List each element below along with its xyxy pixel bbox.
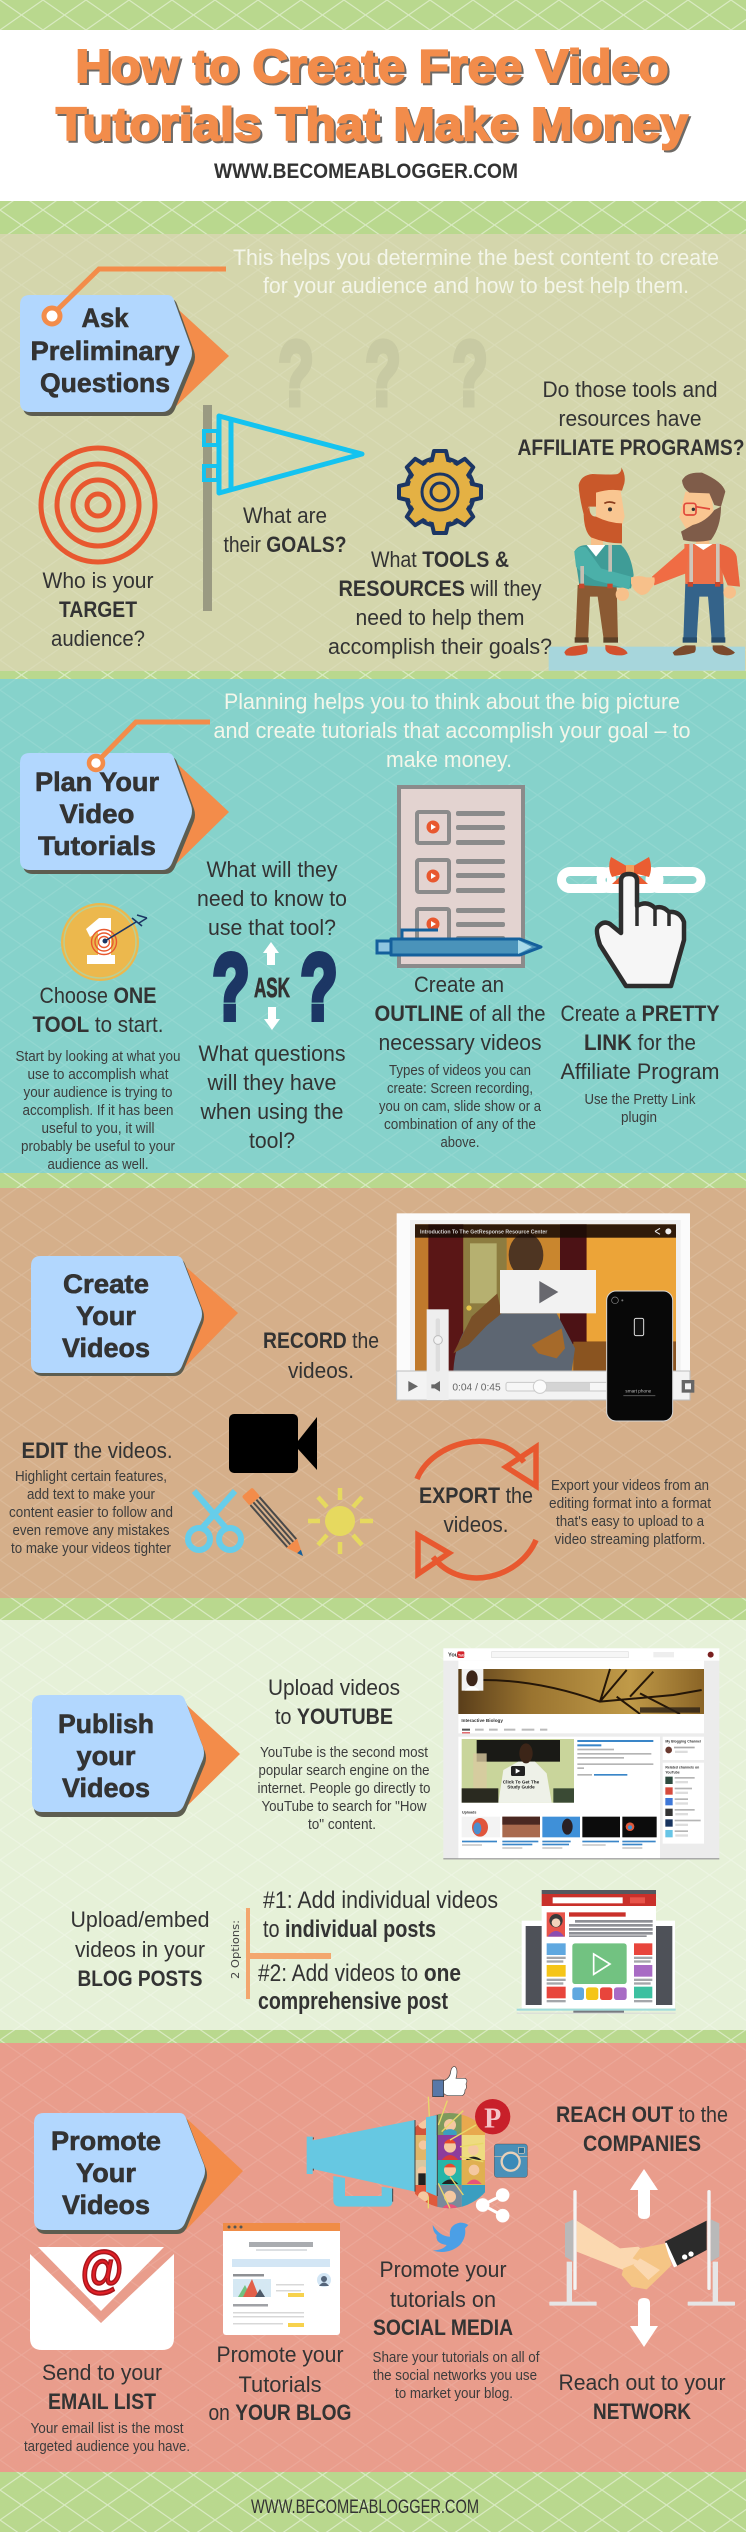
heading label: publish your videos: your (76, 1741, 136, 1771)
record text (263, 1328, 379, 1383)
pretty link text: Affiliate Program (560, 1059, 720, 1084)
youtube channel screenshot: Click To Get The (503, 1779, 540, 1784)
need to know text: need to know to (197, 886, 347, 911)
your blog text: Tutorials (238, 2372, 322, 2397)
youtube description: to" content. (308, 1816, 376, 1833)
companies text: REACH OUT to the (556, 2102, 728, 2127)
record text: RECORD the (263, 1328, 379, 1353)
social media text: SOCIAL MEDIA (373, 2315, 513, 2340)
icon: blog page (223, 2223, 340, 2335)
your blog text: on YOUR BLOG (208, 2400, 352, 2425)
choose one tool description: accomplish. If it has been (22, 1102, 174, 1119)
target audience text (42, 568, 154, 651)
icon: email envelope (30, 2241, 174, 2350)
smartphone: smart phone (625, 1388, 652, 1393)
youtube channel screenshot: You (448, 1653, 459, 1659)
arrow: down (630, 2298, 658, 2347)
pen (377, 930, 541, 955)
social media text (373, 2257, 513, 2340)
icon: video outline document with pen (377, 787, 541, 966)
outline text: necessary videos (378, 1030, 542, 1055)
outline text (374, 972, 546, 1055)
pretty link text: LINK for the (584, 1030, 696, 1055)
youtube description: YouTube to search for "How (262, 1798, 427, 1815)
panel: create your videos (9, 1213, 712, 1578)
questions text: when using the (200, 1099, 344, 1124)
your blog text (208, 2342, 352, 2425)
heading label: ask preliminary questions: Questions (40, 368, 170, 398)
youtube description: popular search engine on the (258, 1762, 430, 1779)
heading label: publish your videos: Publish (58, 1709, 154, 1739)
blog posts text: videos in your (75, 1937, 205, 1962)
choose one tool description: useful to you, it will (42, 1120, 154, 1137)
choose one tool description: audience as well. (48, 1156, 148, 1173)
choose one tool text: Choose ONE (40, 983, 156, 1008)
icon: gear (399, 451, 481, 533)
icon: scissors (188, 1491, 241, 1550)
choose one tool description: Start by looking at what you (16, 1048, 180, 1065)
panel: plan your video tutorials (16, 689, 720, 1173)
choose one tool description: probably be useful to your (21, 1138, 175, 1155)
email list description: targeted audience you have. (24, 2438, 190, 2455)
affiliate programs text (518, 377, 744, 460)
footer url: WWW.BECOMEABLOGGER.COM (251, 2497, 479, 2518)
youtube description: internet. People go directly to (258, 1780, 430, 1797)
export text: videos. (444, 1512, 508, 1537)
panel: promote your videos (24, 2067, 735, 2455)
title: Tutorials That Make Money (56, 98, 688, 150)
youtube channel screenshot: Related channels on (665, 1766, 699, 1770)
export description: Export your videos from an (551, 1477, 709, 1494)
export description: editing format into a format (549, 1495, 712, 1512)
heading label: promote your videos: Promote (51, 2126, 161, 2156)
youtube channel screenshot: Study Guide (507, 1785, 535, 1790)
icon: video camera (229, 1414, 317, 1473)
edit description: even remove any mistakes (12, 1522, 170, 1539)
intro text (214, 689, 690, 772)
pinterest: P (484, 2104, 501, 2135)
question marks (278, 323, 488, 425)
blog posts text (70, 1907, 210, 1991)
outline text: Create an (414, 972, 504, 997)
icon: export cycle arrows (417, 1441, 536, 1578)
outline description: create: Screen recording, (387, 1080, 533, 1097)
target audience text: audience? (51, 626, 145, 651)
option one text: #1: Add individual videos (263, 1887, 498, 1914)
heading label: plan your video tutorials: Video (60, 799, 134, 829)
heading label: plan your video tutorials (20, 722, 229, 874)
icon: sun (308, 1488, 373, 1554)
pretty link description (584, 1091, 696, 1126)
network text (558, 2370, 726, 2424)
choose one tool description: use to accomplish what (28, 1066, 169, 1083)
intro text: and create tutorials that accomplish your goal – to (214, 718, 690, 743)
youtube text (268, 1675, 400, 1729)
title (56, 40, 688, 150)
pretty link text (560, 1001, 720, 1084)
questions text (198, 1041, 346, 1153)
edit description (9, 1468, 173, 1557)
export text (419, 1483, 533, 1537)
options bracket (229, 1908, 331, 1999)
email list text: EMAIL LIST (48, 2389, 156, 2414)
heading label: promote your videos: Your (76, 2158, 136, 2188)
outline description: combination of any of the (384, 1116, 536, 1133)
youtube channel screenshot: Interactive Biology (461, 1718, 503, 1723)
affiliate programs text: resources have (558, 406, 702, 431)
affiliate programs text: Do those tools and (542, 377, 718, 402)
social media text: Promote your (380, 2257, 506, 2282)
facebook thumb (433, 2067, 467, 2097)
youtube channel screenshot: My Blogging Channel (665, 1740, 701, 1744)
icon: ask with question marks and arrows: ? (300, 935, 338, 1039)
outline text: OUTLINE of all the (374, 1001, 546, 1026)
youtube text: to YOUTUBE (275, 1704, 393, 1729)
heading label: ask preliminary questions (20, 269, 229, 416)
youtube channel screenshot: Uploads (462, 1810, 476, 1814)
illustration: handshake between monitors (549, 2190, 735, 2306)
pretty link description: Use the Pretty Link (584, 1091, 696, 1108)
video player screenshot with smartphone: Introduction To The GetResponse Resource Center (420, 1230, 548, 1236)
icon: target (41, 448, 155, 562)
icon: email envelope: @ (80, 2241, 124, 2299)
export description: that's easy to upload to a (556, 1513, 705, 1530)
illustration: two men shaking hands (549, 467, 745, 671)
right man (652, 473, 740, 655)
share icon (476, 2188, 509, 2222)
goals text: What are (243, 503, 327, 528)
edit description: Highlight certain features, (15, 1468, 167, 1485)
email list description (24, 2420, 190, 2455)
heading label: create your videos: Create (63, 1269, 149, 1299)
outline description: you on cam, slide show or a (379, 1098, 542, 1115)
edit description: content easier to follow and (9, 1504, 173, 1521)
heading label: create your videos: Your (76, 1301, 136, 1331)
heading label: ask preliminary questions: Ask (82, 303, 129, 333)
intro text (233, 245, 719, 298)
export description: video streaming platform. (554, 1531, 706, 1548)
icon: pennant flag (203, 405, 362, 611)
panel: publish your videos (32, 1648, 719, 2015)
icon: ask with question marks and arrows: ? (212, 935, 250, 1039)
icon: number one target badge (61, 903, 147, 981)
your blog text: Promote your (216, 2342, 344, 2367)
edit text: EDIT the videos. (22, 1438, 172, 1463)
heading label: create your videos (31, 1256, 238, 1376)
email list description: Your email list is the most (30, 2420, 184, 2437)
heading label: publish your videos: Videos (62, 1773, 150, 1803)
megaphone (307, 2115, 437, 2207)
tools text: accomplish their goals? (328, 634, 552, 659)
blog posts text: BLOG POSTS (78, 1966, 202, 1991)
youtube description: YouTube is the second most (260, 1744, 429, 1761)
pretty link text: Create a PRETTY (560, 1001, 720, 1026)
companies text (556, 2102, 728, 2156)
intro text: This helps you determine the best content to create (233, 245, 719, 270)
heading label: create your videos: Videos (62, 1333, 150, 1363)
social media description: Share your tutorials on all of (372, 2349, 540, 2366)
youtube channel screenshot: Tube (458, 1653, 466, 1657)
video player screenshot with smartphone: 0:04 / 0:45 (452, 1382, 501, 1393)
icon: ask with question marks and arrows (212, 935, 338, 1039)
light rays (428, 2097, 483, 2208)
website url: WWW.BECOMEABLOGGER.COM (214, 160, 518, 183)
option one text: to individual posts (263, 1916, 436, 1943)
video player screenshot with smartphone (397, 1213, 694, 1421)
heading label: plan your video tutorials: Plan Your (35, 767, 159, 797)
crowd of faces (415, 2110, 485, 2210)
edit description: to make your videos tighter (11, 1540, 171, 1557)
choose one tool text: TOOL to start. (32, 1012, 164, 1037)
intro text: Planning helps you to think about the big picture (224, 689, 680, 714)
network text: Reach out to your (558, 2370, 726, 2395)
youtube channel screenshot: YouTube (665, 1770, 680, 1774)
clasped hands (631, 576, 655, 595)
intro text: for your audience and how to best help them. (263, 273, 689, 298)
options bracket: 2 Options: (229, 1920, 242, 1979)
icon: chain link with bow and pointing hand (562, 857, 701, 986)
record text: videos. (288, 1358, 354, 1383)
pinterest (475, 2099, 510, 2135)
pretty link description: plugin (621, 1109, 657, 1126)
option two text: comprehensive post (258, 1988, 448, 2015)
intro text: make money. (386, 747, 512, 772)
export description (549, 1477, 712, 1548)
goals text (224, 503, 346, 557)
option two text (258, 1960, 461, 2015)
arrow: up (630, 2169, 658, 2219)
question marks: ? (278, 323, 314, 425)
question marks: ? (365, 323, 401, 425)
outline description: above. (440, 1134, 480, 1151)
questions text: tool? (249, 1128, 295, 1153)
youtube description (258, 1744, 430, 1833)
choose one tool description (16, 1048, 180, 1173)
heading label: promote your videos (34, 2113, 243, 2234)
panel: ask preliminary questions (20, 245, 745, 671)
social media description: to market your blog. (395, 2385, 513, 2402)
smartphone (607, 1291, 673, 1421)
youtube text: Upload videos (268, 1675, 400, 1700)
title: How to Create Free Video (76, 40, 668, 92)
twitter bird (433, 2223, 468, 2252)
tools text: need to help them (356, 605, 524, 630)
instagram (494, 2144, 527, 2177)
outline description (379, 1062, 542, 1151)
email list text: Send to your (42, 2360, 162, 2385)
heading label: ask preliminary questions: Preliminary (30, 336, 180, 366)
goals text: their GOALS? (224, 532, 346, 557)
heading label: publish your videos (32, 1695, 240, 1817)
social media text: tutorials on (390, 2287, 496, 2312)
option two text: #2: Add videos to one (258, 1960, 461, 1987)
icon: ask with question marks and arrows: ASK (254, 972, 290, 1003)
youtube channel screenshot (443, 1648, 719, 1859)
icon: pencil (242, 1487, 308, 1561)
question marks: ? (452, 323, 488, 425)
heading label: plan your video tutorials: Tutorials (38, 831, 156, 861)
email list text (42, 2360, 162, 2414)
choose one tool text (32, 983, 164, 1037)
tools text: RESOURCES will they (338, 576, 542, 601)
need to know text (197, 857, 347, 940)
export text: EXPORT the (419, 1483, 533, 1508)
tools text (328, 547, 552, 659)
network text: NETWORK (593, 2399, 691, 2424)
left man (564, 467, 634, 656)
heading label: promote your videos: Videos (62, 2190, 150, 2220)
tools text: What TOOLS & (371, 547, 509, 572)
social media description: the social networks you use (373, 2367, 537, 2384)
edit description: add text to make your (27, 1486, 155, 1503)
outline description: Types of videos you can (389, 1062, 531, 1079)
option one text (263, 1887, 498, 1943)
need to know text: use that tool? (208, 915, 336, 940)
icon: megaphone with social media icons (307, 2067, 527, 2252)
questions text: What questions (198, 1041, 346, 1066)
blog posts text: Upload/embed (70, 1907, 210, 1932)
companies text: COMPANIES (583, 2131, 701, 2156)
icon: blog page layout (517, 1890, 676, 2014)
target audience text: TARGET (59, 597, 137, 622)
choose one tool description: your audience is trying to (24, 1084, 172, 1101)
questions text: will they have (207, 1070, 336, 1095)
need to know text: What will they (206, 857, 338, 882)
target audience text: Who is your (42, 568, 154, 593)
social media description (372, 2349, 540, 2402)
